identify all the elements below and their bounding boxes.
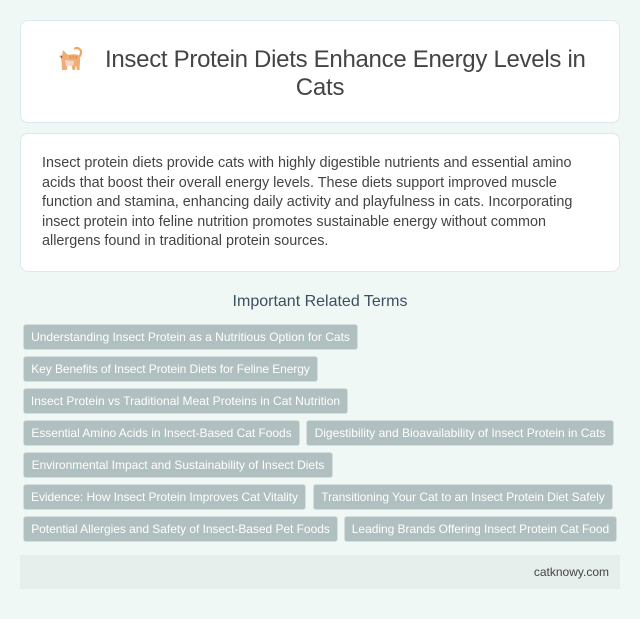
description text: insect protein into feline nutrition promotes sustainable energy without common xyxy=(42,214,546,230)
chip xyxy=(23,324,358,350)
chip xyxy=(344,516,617,542)
icon: cat xyxy=(58,46,82,70)
title text: Insect Protein Diets Enhance Energy Levels in xyxy=(105,46,586,73)
chip xyxy=(23,388,348,414)
chip: Transitioning Your Cat to an Insect Protein Diet Safely xyxy=(321,490,605,504)
term chips xyxy=(23,324,617,542)
chip: Key Benefits of Insect Protein Diets for Feline Energy xyxy=(31,362,310,376)
description text: acids that boost their overall energy levels. These diets support improved muscle xyxy=(42,174,557,190)
chip xyxy=(23,516,338,542)
chip: Digestibility and Bioavailability of Insect Protein in Cats xyxy=(315,426,605,440)
chip xyxy=(23,420,300,446)
description text: function and stamina, enhancing daily activity and playfulness in cats. Incorporating xyxy=(42,194,572,210)
footer xyxy=(20,555,620,589)
heading: related terms: Important Related Terms xyxy=(233,293,407,310)
description text: Insect protein diets provide cats with highly digestible nutrients and essential amino xyxy=(42,155,572,171)
footer source: catknowy.com xyxy=(534,565,609,579)
chip xyxy=(23,484,306,510)
chip xyxy=(306,420,614,446)
chip: Potential Allergies and Safety of Insect-Based Pet Foods xyxy=(31,522,330,536)
description text xyxy=(42,155,572,249)
chip: Essential Amino Acids in Insect-Based Cat Foods xyxy=(31,426,292,440)
chip: Evidence: How Insect Protein Improves Cat Vitality xyxy=(31,490,298,504)
description text: allergens found in traditional protein sources. xyxy=(42,233,328,249)
panel: title xyxy=(20,20,620,123)
chip xyxy=(23,452,333,478)
chip: Leading Brands Offering Insect Protein Cat Food xyxy=(352,522,609,536)
chip xyxy=(313,484,613,510)
chip: Understanding Insect Protein as a Nutritious Option for Cats xyxy=(31,330,350,344)
chip xyxy=(23,356,318,382)
panel: description xyxy=(20,133,620,272)
title text: second line: Cats xyxy=(296,74,344,101)
chip: Environmental Impact and Sustainability of Insect Diets xyxy=(32,458,324,472)
chip: Insect Protein vs Traditional Meat Proteins in Cat Nutrition xyxy=(31,394,340,408)
